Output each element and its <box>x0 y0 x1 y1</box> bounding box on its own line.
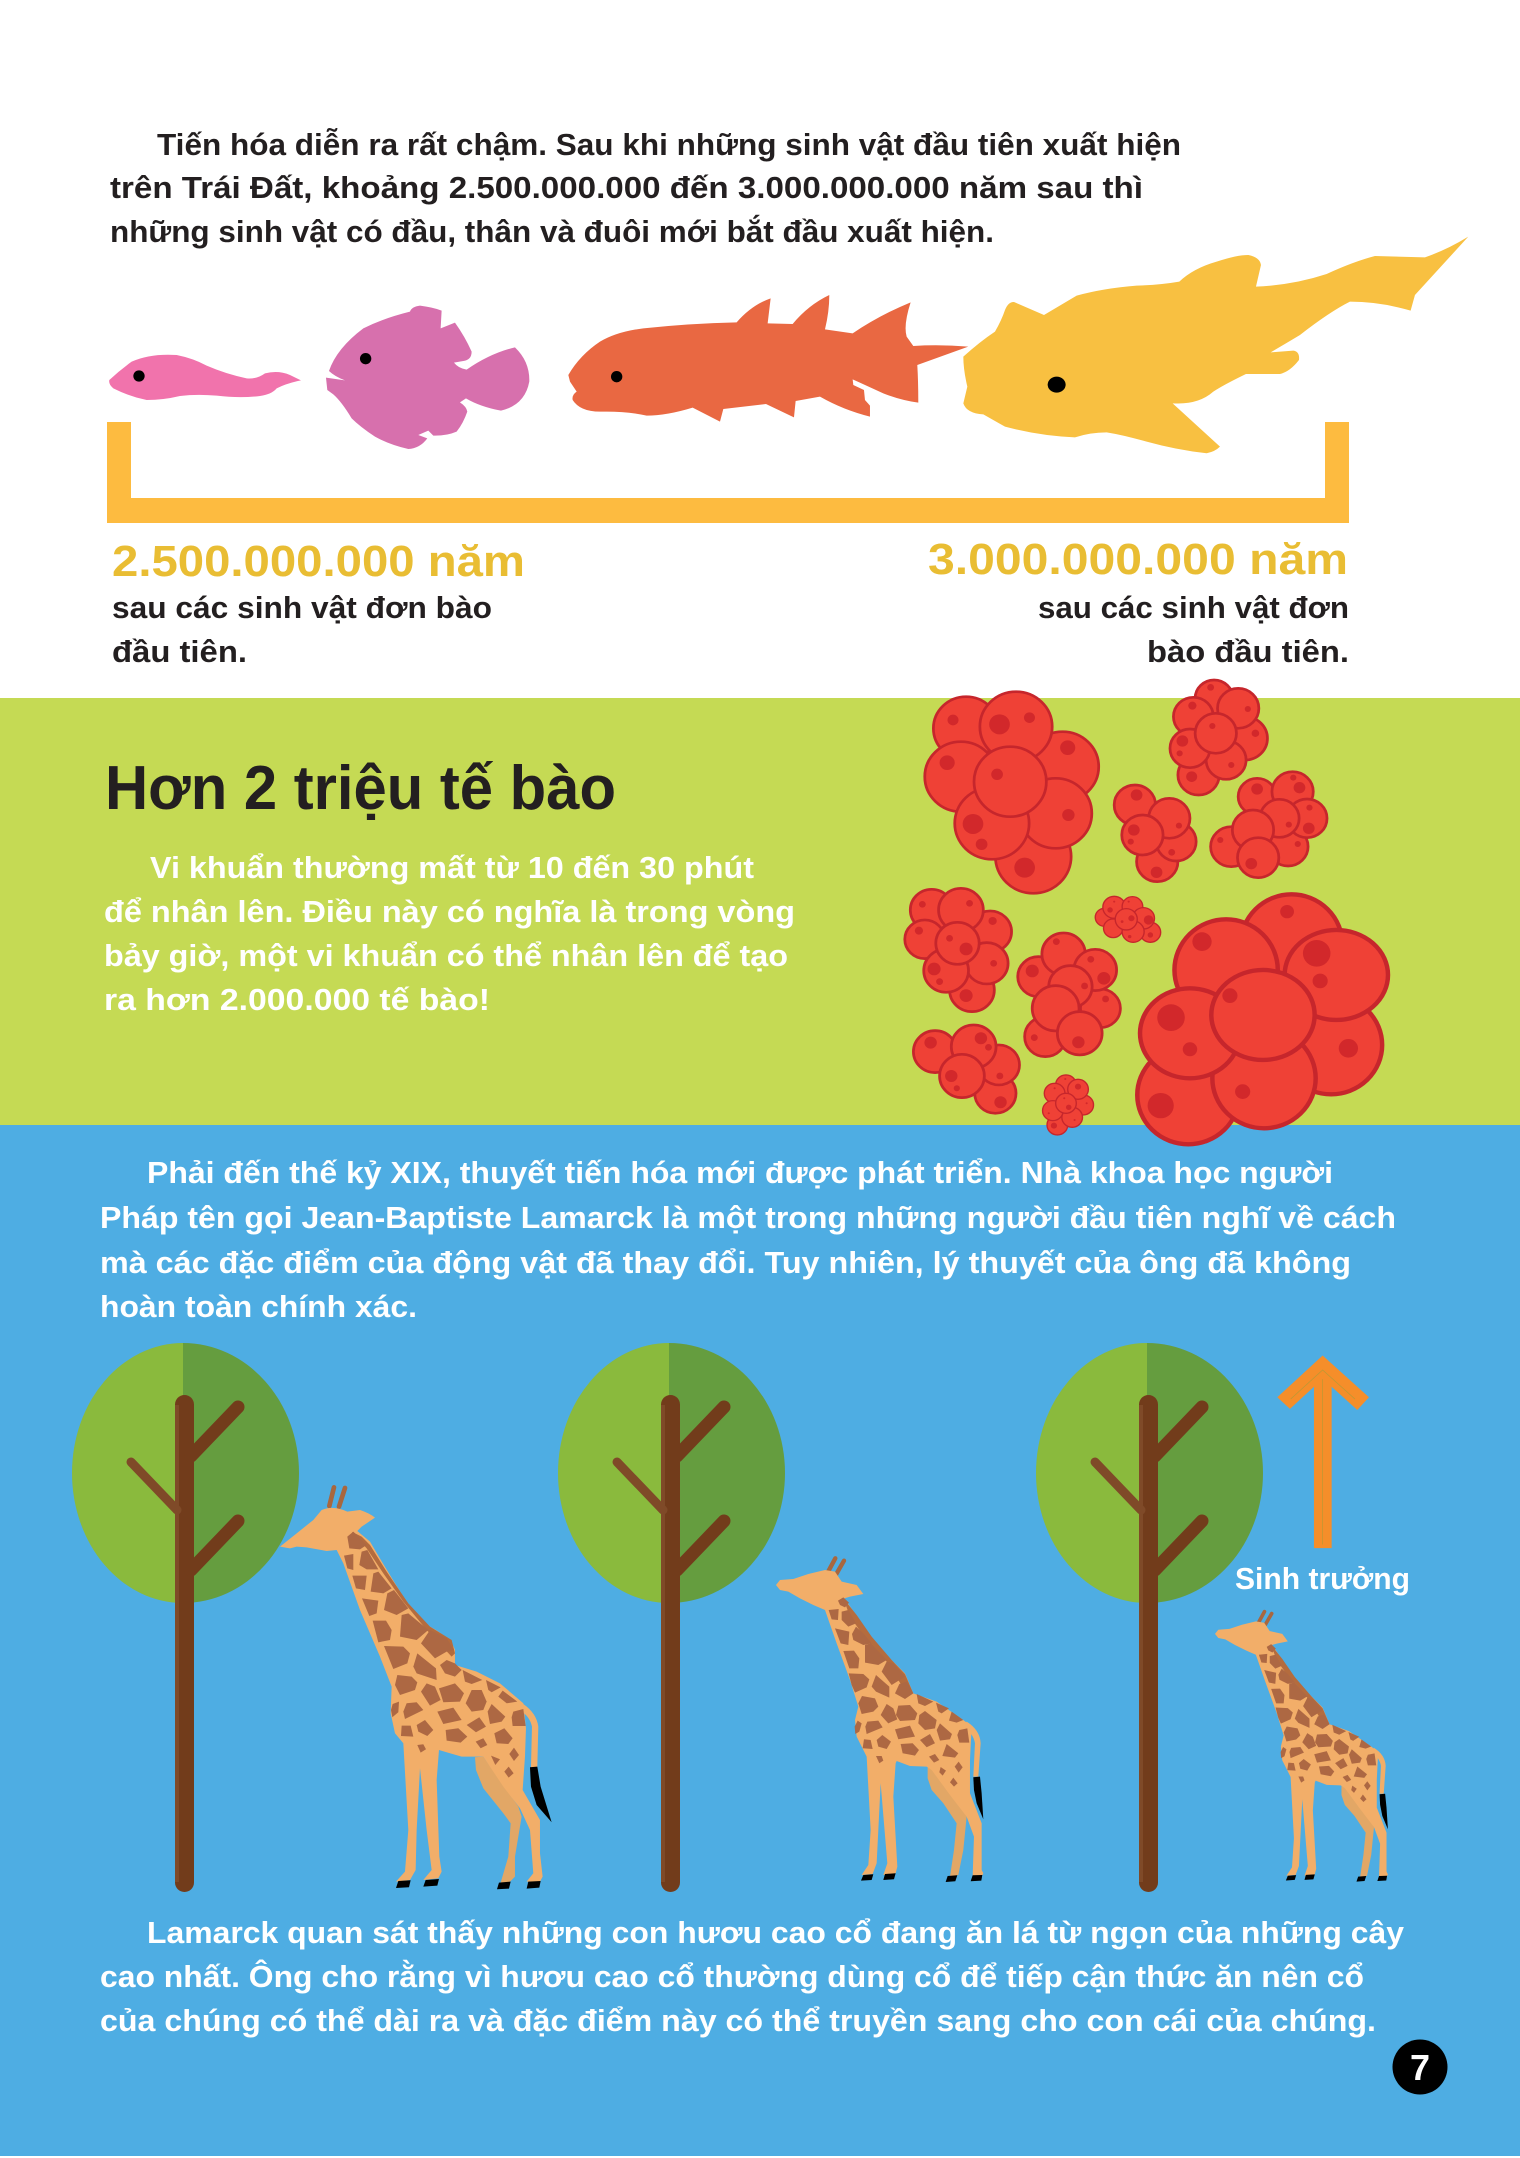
giraffe 3 smallest <box>1215 1612 1388 1882</box>
tree 2 <box>558 1343 785 1892</box>
icon: orange fish <box>568 295 968 422</box>
panel: green bacteria band <box>0 698 1520 1125</box>
bacteria cluster: centre <box>1114 785 1196 882</box>
timeline label: 3.000.000.000 years <box>928 535 1349 669</box>
Lamarck intro text block: mà các đặc điểm của động vật đã thay đổi. Tuy nhiên, lý thuyết của ông đã không <box>100 1245 1351 1280</box>
timeline label: 3.000.000.000 years: bào đầu tiên. <box>1147 634 1349 669</box>
bacteria cluster: right <box>1211 772 1327 878</box>
tree 1 <box>72 1343 299 1892</box>
arrow: growth upward <box>1277 1355 1369 1548</box>
Lamarck intro text block <box>100 1155 1396 1324</box>
Lamarck intro text block: Phải đến thế kỷ XIX, thuyết tiến hóa mới được phát triển. Nhà khoa học người <box>147 1155 1333 1190</box>
timeline bracket <box>107 422 1349 523</box>
intro text block <box>110 127 1181 249</box>
bacteria cluster: large top left <box>925 692 1099 893</box>
bacteria cluster: large bottom right <box>1137 894 1388 1144</box>
tree 3 <box>1036 1343 1263 1892</box>
icon: pink fish <box>109 355 301 400</box>
timeline label: 2.500.000.000 years <box>112 537 525 669</box>
intro text block: Tiến hóa diễn ra rất chậm. Sau khi những sinh vật đầu tiên xuất hiện <box>157 127 1181 162</box>
giraffe 1 eating from the tree <box>280 1487 552 1889</box>
Lamarck conclusion text block <box>100 1915 1405 2038</box>
bacteria text block: để nhân lên. Điều này có nghĩa là trong vòng <box>104 894 795 929</box>
bacteria text block: ra hơn 2.000.000 tế bào! <box>104 982 490 1017</box>
bacteria cluster: top centre right <box>1170 680 1267 795</box>
label: growth: Sinh trưởng <box>1235 1561 1410 1596</box>
page number badge: 7 <box>1410 2047 1430 2088</box>
page number badge <box>1392 2040 1448 2094</box>
icon: yellow fish <box>963 237 1468 453</box>
bacteria text block: Vi khuẩn thường mất từ 10 đến 30 phút <box>150 850 754 885</box>
intro text block: những sinh vật có đầu, thân và đuôi mới bắt đầu xuất hiện. <box>110 213 994 249</box>
Lamarck intro text block: hoàn toàn chính xác. <box>100 1289 417 1324</box>
timeline label: 2.500.000.000 years: sau các sinh vật đơn bào <box>112 590 492 625</box>
heading: two million cells: Hơn 2 triệu tế bào <box>105 754 616 823</box>
timeline label: 3.000.000.000 years: 3.000.000.000 năm <box>928 535 1348 584</box>
bacteria cluster: lower left <box>913 1025 1019 1113</box>
Lamarck conclusion text block: của chúng có thể dài ra và đặc điểm này có thể truyền sang cho con cái của chúng. <box>100 2003 1376 2038</box>
Lamarck conclusion text block: Lamarck quan sát thấy những con hươu cao cổ đang ăn lá từ ngọn của những cây <box>147 1915 1405 1950</box>
timeline label: 3.000.000.000 years: sau các sinh vật đơn <box>1038 590 1349 625</box>
bacteria text block: bảy giờ, một vi khuẩn có thể nhân lên để tạo <box>104 938 788 973</box>
timeline label: 2.500.000.000 years: 2.500.000.000 năm <box>112 537 525 586</box>
intro text block: trên Trái Đất, khoảng 2.500.000.000 đến 3.000.000.000 năm sau thì <box>110 170 1143 205</box>
fish evolution illustration <box>109 237 1468 453</box>
giraffe 2 reaching up <box>776 1558 983 1882</box>
Lamarck conclusion text block: cao nhất. Ông cho rằng vì hươu cao cổ thường dùng cổ để tiếp cận thức ăn nên cổ <box>100 1958 1364 1994</box>
bacteria cluster: tiny centre <box>1095 896 1161 942</box>
icon: purple fish <box>326 306 529 449</box>
bacteria cluster: middle <box>1018 933 1120 1057</box>
bacteria cluster: tiny bottom <box>1043 1075 1094 1135</box>
bacteria cluster: middle left <box>905 888 1012 1012</box>
Lamarck intro text block: Pháp tên gọi Jean-Baptiste Lamarck là một trong những người đầu tiên nghĩ về cách <box>100 1200 1396 1235</box>
timeline label: 2.500.000.000 years: đầu tiên. <box>112 634 247 669</box>
bacteria illustration <box>905 680 1388 1144</box>
bacteria text block <box>104 850 795 1017</box>
panel: blue Lamarck band <box>0 1125 1520 2156</box>
